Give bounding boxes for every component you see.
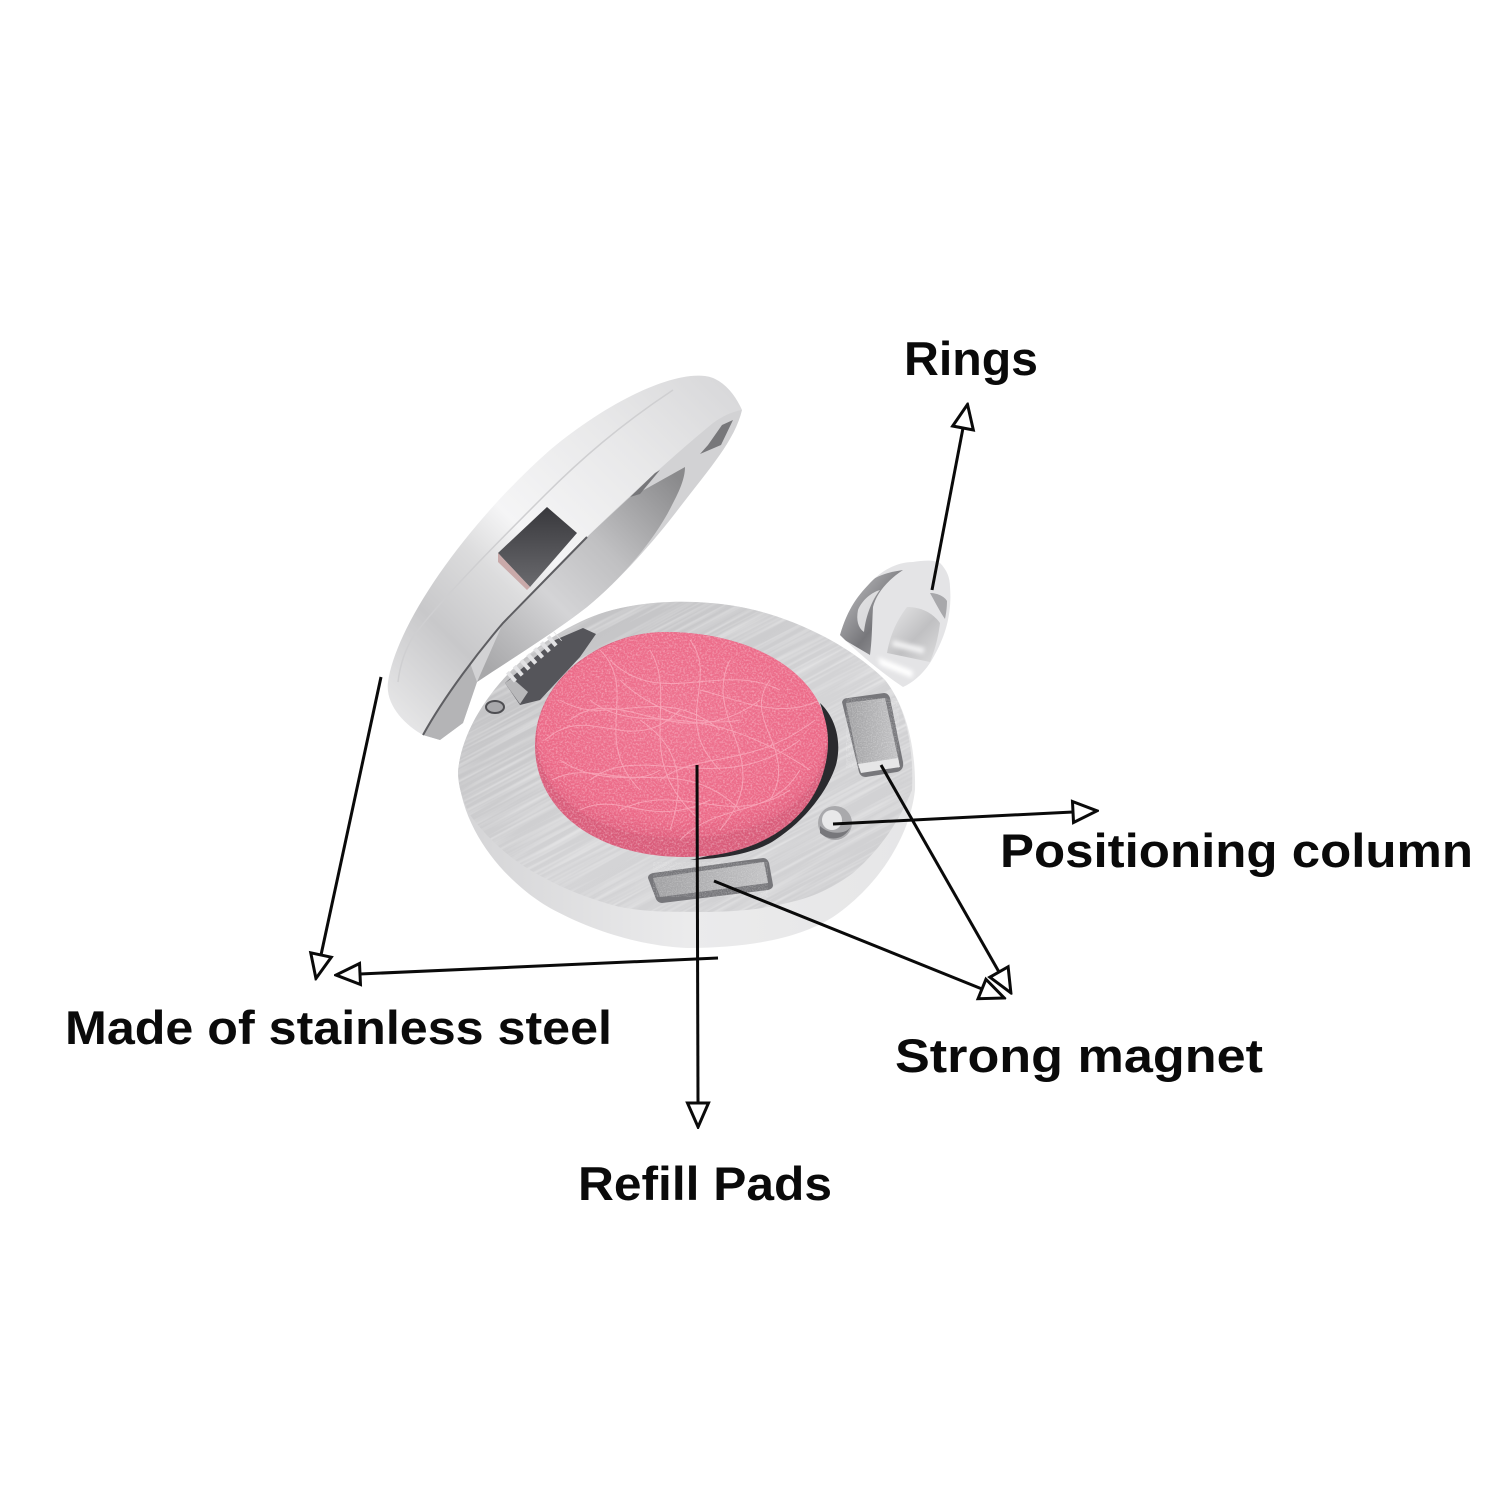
arrow: lid to stainless steel label	[321, 677, 381, 955]
lid recess	[477, 467, 685, 682]
lid dark reflection	[498, 507, 577, 587]
lid outer band	[388, 376, 742, 735]
locket product illustration	[388, 376, 950, 948]
icon: hinge	[486, 628, 596, 713]
lid lower shadow	[423, 663, 477, 740]
label: Made of stainless steel: Made of stainless steel	[65, 1001, 612, 1054]
arrow: right magnet to Strong magnet	[881, 765, 999, 972]
icon: pink refill pad	[530, 628, 832, 860]
icon: hanging ring	[838, 561, 950, 687]
icon: right magnet	[842, 693, 903, 777]
arrow: base to stainless steel label	[360, 958, 718, 974]
icon: positioning column	[818, 806, 852, 840]
label: Rings: Rings	[904, 332, 1038, 385]
label: Refill Pads: Refill Pads	[578, 1157, 832, 1210]
arrow: to Rings	[932, 428, 963, 590]
arrow: to Refill Pads	[697, 765, 698, 1103]
icon: bottom magnet	[648, 858, 773, 903]
label: Positioning column: Positioning column	[1000, 824, 1473, 877]
panel: open lid	[388, 376, 742, 740]
panel: locket base disc	[458, 602, 915, 948]
arrow: to Positioning column	[833, 812, 1073, 824]
lid inner surface	[423, 410, 742, 740]
arrow: bottom magnet to Strong magnet	[714, 881, 982, 989]
label: Strong magnet: Strong magnet	[895, 1029, 1263, 1082]
